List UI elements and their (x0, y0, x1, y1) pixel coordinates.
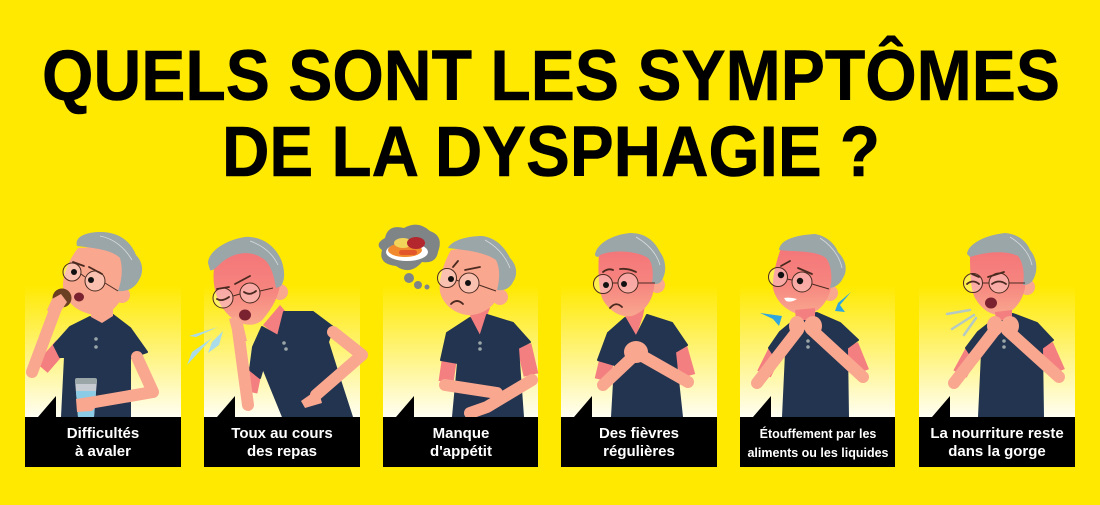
title (42, 36, 1060, 192)
panel: étouffement (740, 234, 895, 467)
caption box (383, 396, 538, 467)
panel: la nourriture reste dans la gorge (919, 233, 1075, 467)
panel: difficultés à avaler (25, 232, 181, 467)
icon: blue alarm sparks (760, 292, 851, 326)
figure: man thinking of food (379, 225, 532, 417)
caption box: Des fièvres (599, 425, 679, 442)
icon: thought bubble with plate of food (379, 225, 440, 290)
caption box: Étouffement par les (760, 426, 876, 441)
caption box: Toux au cours (231, 425, 333, 442)
caption box: Manque (433, 425, 489, 442)
caption box (561, 396, 717, 467)
caption box: régulières (603, 443, 675, 460)
caption box: dans la gorge (948, 443, 1046, 460)
panel: des fièvres régulières (561, 233, 717, 467)
caption box: aliments ou les liquides (747, 446, 889, 460)
icon: cough lines (947, 310, 976, 335)
caption box: La nourriture reste (930, 425, 1064, 442)
caption box: d'appétit (430, 443, 492, 460)
panel: toux au cours des repas (187, 237, 362, 467)
figure: coughing man holding his throat (947, 233, 1059, 417)
caption box: des repas (247, 443, 317, 460)
caption box (25, 396, 181, 467)
title: DE LA DYSPHAGIE ? (222, 113, 880, 192)
panel: manque d'appétit (379, 225, 538, 467)
figure: feverish man with hands on chest (594, 233, 688, 417)
caption box: Difficultés (67, 425, 139, 442)
icon: glass of water (75, 378, 100, 417)
caption box (919, 396, 1075, 467)
caption box (740, 396, 895, 467)
figure: choking man holding his throat (757, 234, 863, 417)
figure: man holding a biscuit and a glass (32, 232, 153, 417)
caption box (204, 396, 360, 467)
caption box: à avaler (75, 443, 131, 460)
icon: biscuit (52, 288, 72, 308)
icon: cough spray (187, 327, 223, 365)
figure: man coughing into his hand (187, 237, 362, 417)
